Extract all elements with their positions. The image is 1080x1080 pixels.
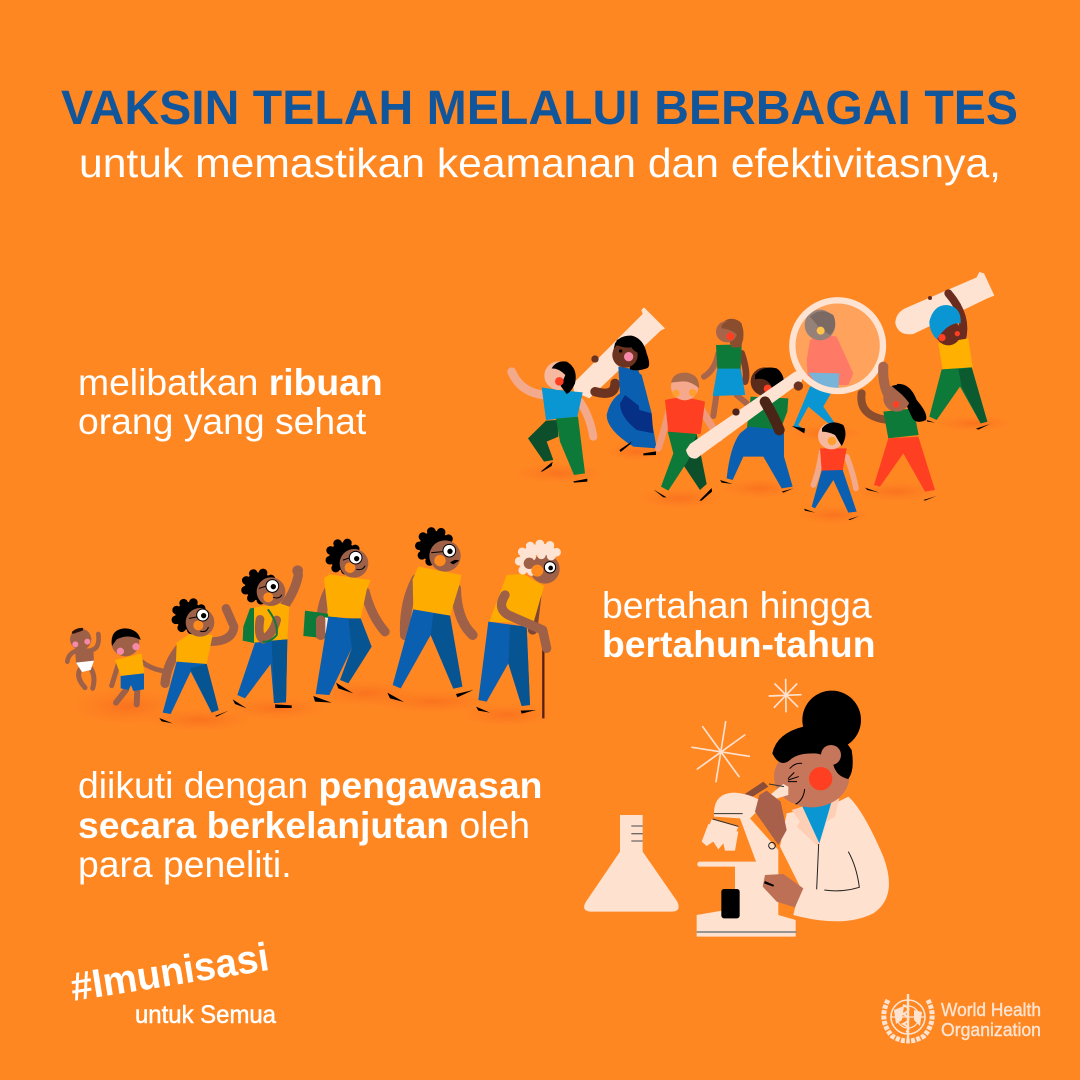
title: VAKSIN TELAH MELALUI BERBAGAI TES bbox=[61, 81, 1018, 135]
title bbox=[61, 81, 1018, 186]
WHO logo: World Health bbox=[941, 999, 1041, 1020]
title: untuk memastikan keamanan dan efektivitasnya, bbox=[79, 140, 1001, 186]
text block: continued monitoring: secara berkelanjutan oleh bbox=[78, 804, 530, 846]
person in blue sari bbox=[591, 336, 657, 455]
text block: healthy people: orang yang sehat bbox=[78, 400, 367, 442]
text block: lasting years bbox=[602, 584, 875, 665]
WHO emblem bbox=[884, 994, 932, 1041]
ground shadow bbox=[70, 680, 553, 732]
sparkles bbox=[692, 679, 801, 782]
text block: continued monitoring: para peneliti. bbox=[78, 843, 292, 885]
person in salmon shirt behind lens bbox=[792, 383, 837, 433]
teenager with backpack bbox=[233, 565, 303, 708]
person with ponytail in orange trousers bbox=[861, 367, 937, 501]
text block: continued monitoring: diikuti dengan pengawasan bbox=[78, 764, 542, 806]
WHO logo: Organization bbox=[941, 1019, 1041, 1040]
adult woman with book bbox=[303, 542, 385, 703]
text block: lasting years: bertahun-tahun bbox=[602, 623, 875, 665]
baby bbox=[67, 628, 99, 688]
illustration: crowd with test tubes and magnifier bbox=[512, 272, 1013, 524]
text block: healthy people: melibatkan ribuan bbox=[78, 361, 383, 403]
flask bbox=[584, 815, 679, 912]
child in red shirt bbox=[804, 422, 859, 520]
test tube left bbox=[573, 307, 665, 398]
person in green top and blue skirt bbox=[704, 319, 747, 416]
campaign hashtag: #Imunisasi bbox=[68, 935, 272, 1010]
magnifying glass bbox=[686, 300, 883, 459]
child bbox=[159, 602, 234, 723]
person in red shirt bbox=[653, 373, 719, 501]
adult man bbox=[387, 531, 473, 702]
person in blue shirt and green trousers bbox=[512, 361, 593, 483]
microscope bbox=[697, 782, 803, 937]
test tube right bbox=[895, 272, 994, 334]
scientist bbox=[772, 691, 889, 921]
illustration: scientist with microscope and flask bbox=[584, 679, 889, 937]
elder with cane bbox=[476, 544, 560, 718]
illustration: person ageing from baby to elder bbox=[67, 531, 560, 732]
toddler bbox=[111, 628, 162, 704]
ground shadows bbox=[513, 415, 1013, 524]
person in green shirt holding magnifier bbox=[720, 367, 793, 493]
text block: lasting years: bertahan hingga bbox=[602, 584, 872, 626]
person in turban bbox=[927, 293, 990, 430]
campaign hashtag: untuk Semua bbox=[135, 1001, 276, 1029]
text block: continued monitoring bbox=[78, 764, 542, 885]
WHO logo bbox=[884, 994, 1041, 1041]
text block: healthy people bbox=[78, 361, 383, 442]
